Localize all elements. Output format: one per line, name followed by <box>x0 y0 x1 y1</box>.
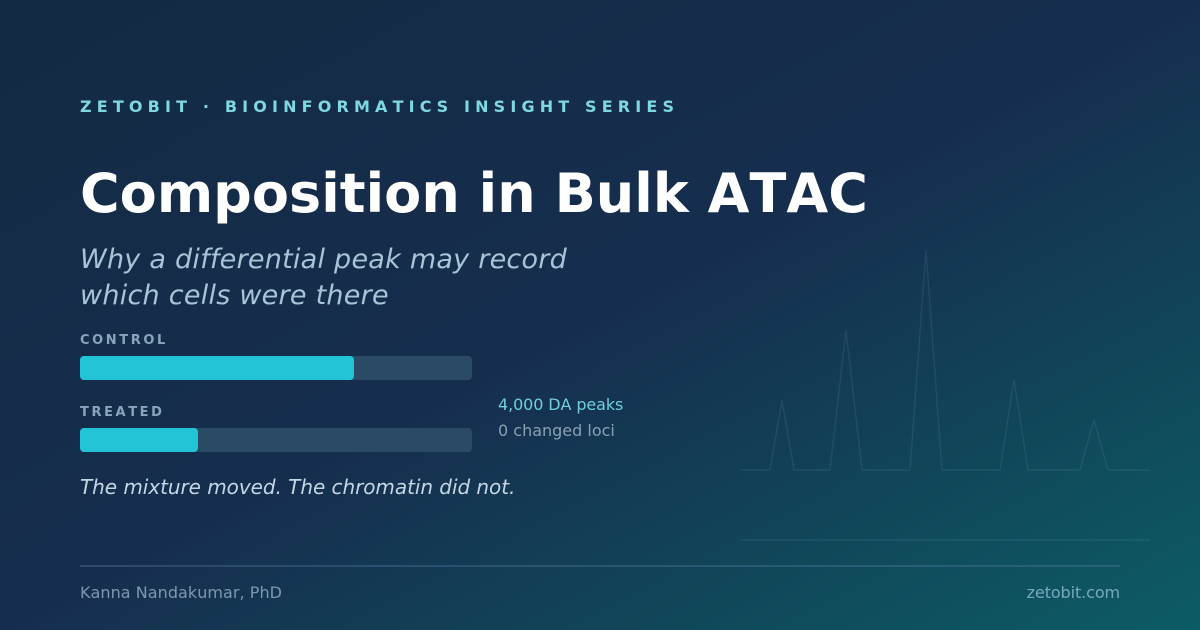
treated bar fill <box>80 428 198 452</box>
bar group: treated <box>80 405 472 452</box>
title: Composition in Bulk ATAC <box>80 162 868 225</box>
eyebrow label: ZETOBIT · BIOINFORMATICS INSIGHT SERIES <box>80 97 679 116</box>
bar group: control <box>80 333 472 380</box>
subtitle <box>80 244 567 311</box>
takeaway: The mixture moved. The chromatin did not. <box>80 475 515 499</box>
subtitle: which cells were there <box>80 280 389 311</box>
control label: CONTROL <box>80 333 168 348</box>
treated bar <box>80 428 472 452</box>
control bar <box>80 356 472 380</box>
stat: DA peaks: 4,000 DA peaks <box>498 395 623 414</box>
subtitle: Why a differential peak may record <box>80 244 567 275</box>
control bar fill <box>80 356 354 380</box>
author: Kanna Nandakumar, PhD <box>80 583 282 602</box>
footer rule <box>80 565 1120 567</box>
treated label: TREATED <box>80 405 165 420</box>
website: zetobit.com <box>1027 583 1120 602</box>
stat: changed loci: 0 changed loci <box>498 421 615 440</box>
